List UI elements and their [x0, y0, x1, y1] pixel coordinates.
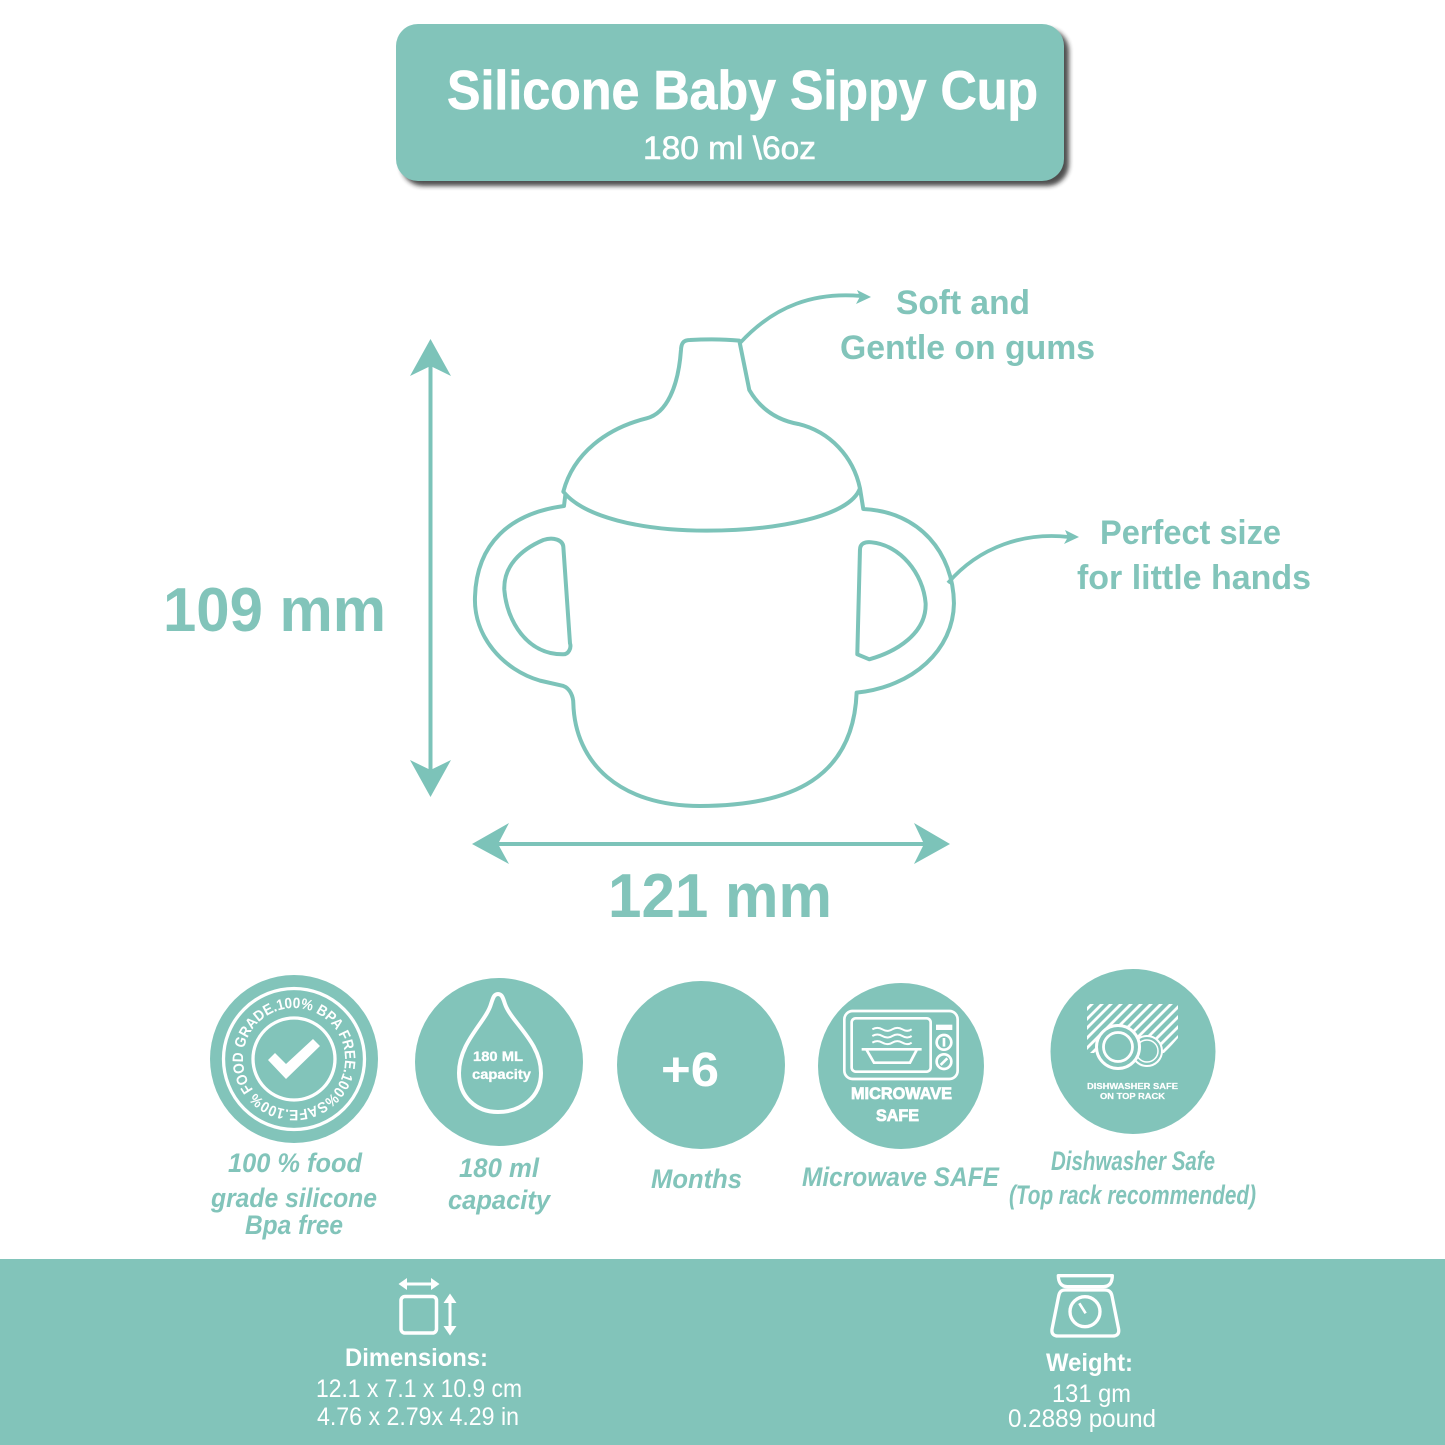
text: dimensions: 12.1 x 7.1 x 10.9 cm — [316, 1375, 522, 1403]
badge: age — [617, 981, 785, 1149]
badge: dishwasher safe: DISHWASHER SAFE — [1087, 1082, 1179, 1091]
subtitle: 180 ml \6oz — [643, 130, 816, 166]
icon: drop — [459, 994, 541, 1112]
caption: food grade: 100 % food — [228, 1148, 362, 1178]
badge: capacity: 180 ML — [473, 1048, 523, 1064]
height label: 109 mm — [163, 576, 386, 645]
caption: food grade: Bpa free — [245, 1210, 343, 1240]
callout: perfect size: Perfect size — [1100, 514, 1281, 552]
icon: plates and hatch — [1087, 1004, 1178, 1070]
caption: dishwasher safe: Dishwasher Safe — [1051, 1146, 1215, 1176]
caption: dishwasher safe — [1009, 1146, 1256, 1210]
arrow: spout callout — [740, 290, 871, 343]
badge: age: +6 — [661, 1044, 719, 1097]
icon: dimensions — [398, 1278, 456, 1336]
caption: capacity: 180 ml — [459, 1153, 539, 1183]
arrow: handle callout — [948, 530, 1079, 583]
caption: months: Months — [651, 1164, 742, 1194]
width label: 121 mm — [608, 862, 832, 931]
title banner — [396, 24, 1069, 186]
text: dimensions: Dimensions: — [345, 1344, 488, 1372]
caption: capacity: capacity — [448, 1185, 552, 1215]
width arrow — [472, 823, 950, 864]
badge: capacity — [415, 978, 583, 1146]
badge: capacity: capacity — [472, 1066, 531, 1082]
callout: soft and gentle: Gentle on gums — [840, 329, 1095, 367]
badge: microwave safe: MICROWAVE — [851, 1084, 952, 1103]
bottom info band — [0, 1259, 1445, 1445]
cup outline illustration — [475, 339, 954, 806]
text: weight: Weight: — [1046, 1349, 1133, 1377]
badge: dishwasher safe — [1050, 969, 1225, 1134]
height arrow — [410, 339, 451, 797]
ring text: FOOD GRADE.100% BPA FREE.100%SAFE.100% — [232, 998, 356, 1120]
icon: check mark — [268, 1039, 320, 1079]
badge: microwave safe: SAFE — [876, 1106, 919, 1125]
text: weight: 0.2889 pound — [1008, 1405, 1156, 1433]
callout: soft and gentle — [840, 284, 1095, 367]
callout: soft and gentle: Soft and — [896, 284, 1030, 322]
icon: kitchen scale — [1052, 1276, 1119, 1336]
badge: dishwasher safe: ON TOP RACK — [1100, 1092, 1165, 1101]
badge: microwave safe — [818, 983, 984, 1149]
text: weight — [1008, 1349, 1156, 1433]
text: dimensions: 4.76 x 2.79x 4.29 in — [317, 1403, 519, 1431]
text: dimensions — [316, 1344, 522, 1431]
icon: microwave — [844, 1011, 958, 1079]
badge: food grade — [210, 975, 378, 1143]
caption: microwave safe: Microwave SAFE — [802, 1162, 1000, 1192]
callout: perfect size — [1077, 514, 1311, 597]
caption: dishwasher safe: (Top rack recommended) — [1009, 1180, 1256, 1210]
caption: food grade: grade silicone — [210, 1183, 377, 1213]
caption: food grade — [210, 1148, 377, 1240]
title: Silicone Baby Sippy Cup — [447, 59, 1038, 121]
callout: perfect size: for little hands — [1077, 559, 1311, 597]
text: weight: 131 gm — [1052, 1380, 1131, 1408]
caption: capacity — [448, 1153, 552, 1215]
